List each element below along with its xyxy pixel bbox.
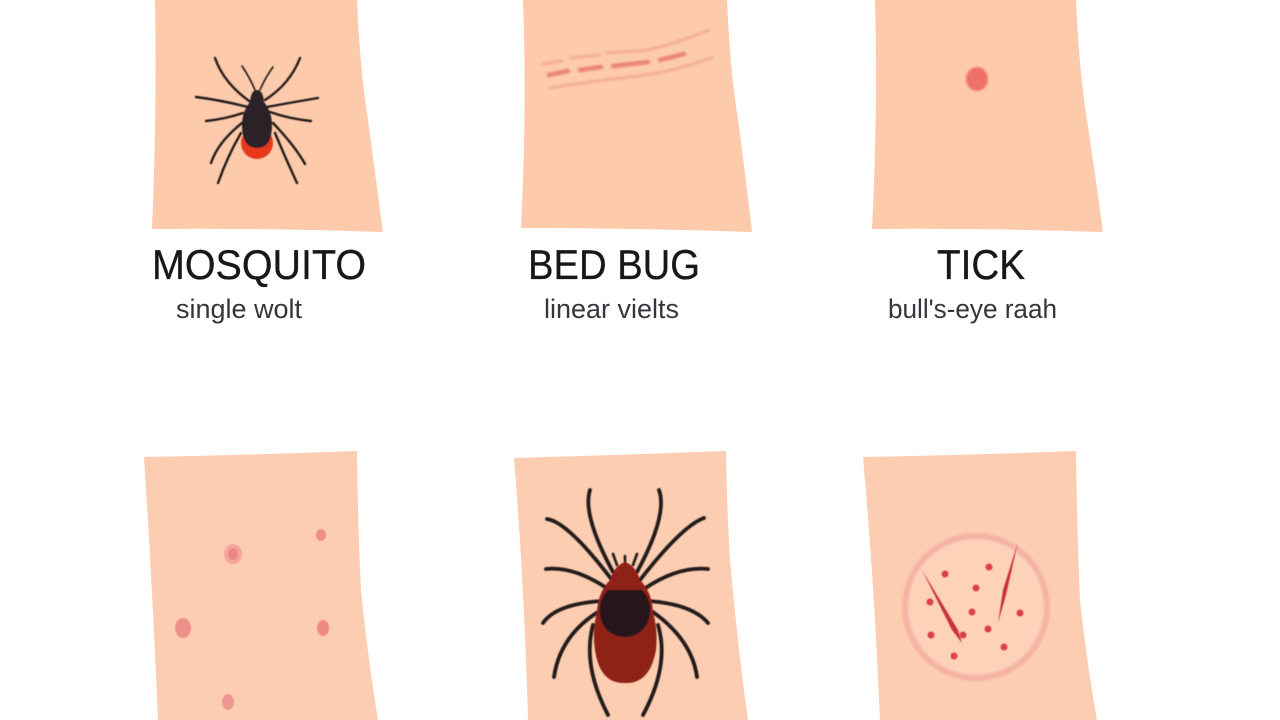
panel: skin with large tick: [514, 451, 748, 720]
panel: skin with scattered spots: [144, 451, 378, 720]
heading: tick: TICK: [937, 241, 1025, 288]
caption: bull's-eye rash: bull's-eye raah: [888, 294, 1057, 324]
icon: small tick: [196, 58, 318, 183]
heading: bed bug: BED BUG: [528, 241, 700, 288]
caption: linear vielts: linear vielts: [544, 294, 679, 324]
panel: bed bug skin with linear welts: [521, 0, 752, 232]
icon: bull's-eye ring with spots and scratches: [905, 536, 1047, 678]
icon: scattered bite spots: [175, 529, 329, 710]
icon: linear welts: [543, 30, 713, 88]
panel: skin with bull's-eye rash: [863, 451, 1097, 720]
red dots: [926, 564, 1024, 660]
icon: red bite spot: [966, 67, 988, 91]
caption: single wolt: single wolt: [176, 294, 302, 324]
panel: mosquito skin with tick illustration: [152, 0, 383, 232]
panel: tick skin with single spot: [872, 0, 1103, 232]
heading: mosquito: MOSQUITO: [152, 241, 366, 288]
scratches: [922, 542, 1018, 643]
icon: large tick: [543, 490, 708, 715]
